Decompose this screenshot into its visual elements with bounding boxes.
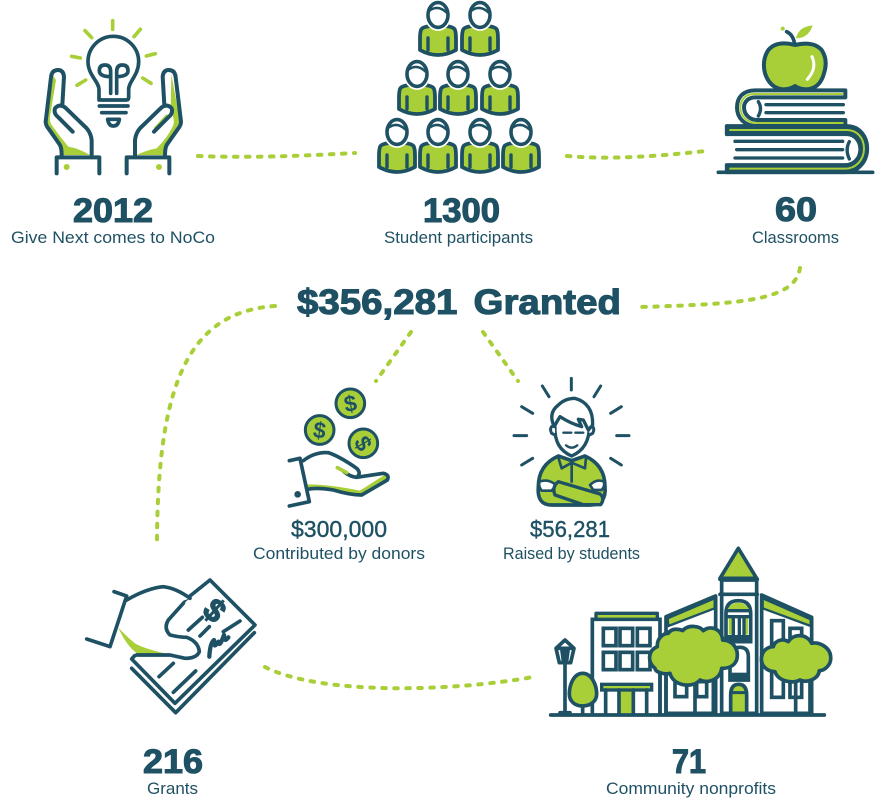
icon: proud student with crossed arms <box>514 378 629 505</box>
stat: 2012: Give Next comes to NoCo <box>11 229 215 247</box>
icon: hand holding check: $ <box>196 591 234 630</box>
stat: 2012 <box>11 192 215 247</box>
stat: 71 community nonprofits: 71 <box>672 743 706 781</box>
icon: apple on books <box>718 25 873 172</box>
stat: 71 community nonprofits: Community nonprofits <box>606 780 776 798</box>
stat: 216 grants: 216 <box>143 743 203 781</box>
stat: 216 grants: Grants <box>147 780 198 798</box>
dotted connector: granted to students <box>483 332 518 381</box>
stat: students: Raised by students <box>503 545 640 563</box>
stat: 60 <box>752 191 839 247</box>
icon: pyramid of students <box>379 3 539 172</box>
stat: 2012: 2012 <box>73 192 153 230</box>
stat: students <box>503 516 640 563</box>
icon: coins falling into hand <box>289 389 388 506</box>
dotted connector: 2012 to 1300 <box>198 153 355 157</box>
heading: total granted: $356,281 Granted <box>297 283 621 322</box>
stat: 1300: 1300 <box>423 192 500 230</box>
dotted connector: 60 to granted <box>640 268 800 307</box>
icon: town buildings and trees <box>551 548 831 715</box>
stat: 1300 <box>384 192 533 247</box>
stat: donors <box>253 516 425 563</box>
stat: 1300: Student participants <box>384 229 533 247</box>
stat: 71 community nonprofits <box>606 743 776 798</box>
dotted connector: grants to nonprofits <box>265 667 533 688</box>
dotted connector: granted to grants <box>157 306 275 540</box>
stat: 60: Classrooms <box>752 229 839 247</box>
stat: 60: 60 <box>775 191 817 229</box>
icon: hand holding check <box>87 580 255 713</box>
dotted connector: granted to donors <box>376 332 411 381</box>
icon: light bulb held by hands <box>46 21 181 173</box>
icon: coins falling into hand: $ <box>342 389 359 417</box>
icon: coins falling into hand: $ <box>349 431 378 456</box>
stat: 216 grants <box>143 743 203 798</box>
dotted connector: 1300 to 60 <box>567 151 706 158</box>
stat: donors: $300,000 <box>291 516 387 542</box>
stat: donors: Contributed by donors <box>253 545 425 563</box>
icon: coins falling into hand: $ <box>312 416 328 444</box>
stat: students: $56,281 <box>530 516 610 542</box>
